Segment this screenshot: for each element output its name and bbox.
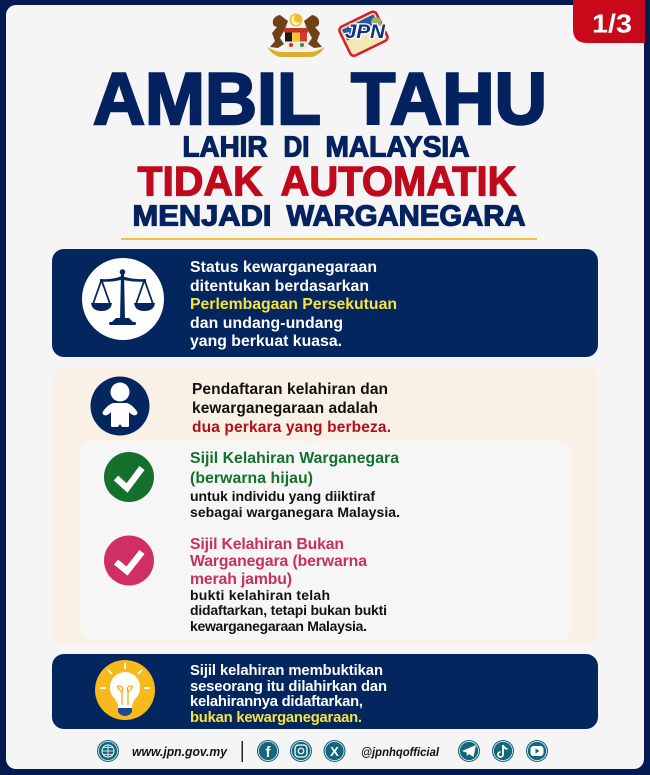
text: registration intro (192, 381, 391, 436)
social handle: @jpnhqofficial (361, 745, 440, 759)
dotted background patch (530, 5, 644, 75)
text: registration intro: Pendaftaran kelahiran dan (192, 381, 388, 398)
text: pink certificate (190, 536, 387, 634)
icon: tiktok (492, 740, 514, 762)
text: green certificate: Sijil Kelahiran Warganegara (190, 450, 399, 467)
page number tab: 1/3 (592, 8, 632, 38)
text: pink certificate: Sijil Kelahiran Bukan (190, 536, 344, 553)
text: green certificate (190, 450, 400, 520)
panel: certificate types (81, 441, 571, 640)
text: registration intro: dua perkara yang berbeza. (192, 419, 391, 436)
icon: green check (104, 452, 154, 502)
title (93, 59, 547, 232)
icon: baby (90, 376, 150, 436)
text: green certificate: (berwarna hijau) (190, 470, 313, 487)
title: DI (284, 132, 310, 164)
panel: constitution statement (52, 249, 598, 357)
icon: instagram (290, 740, 312, 762)
text: key takeaway (190, 663, 387, 726)
text: key takeaway: seseorang itu dilahirkan dan (190, 679, 387, 695)
icon: X: X (330, 744, 339, 759)
icon: youtube (526, 740, 548, 762)
text: green certificate: sebagai warganegara Malaysia. (190, 504, 400, 520)
text: constitution statement: Status kewarganegaraan (190, 259, 377, 276)
icon: facebook (257, 740, 279, 762)
title: TAHU (351, 59, 547, 140)
text: constitution statement (190, 259, 397, 350)
panel: key takeaway (52, 654, 598, 729)
icon: scales of justice (82, 258, 164, 340)
icon: telegram (458, 740, 480, 762)
logo: JPN (338, 10, 389, 57)
text: pink certificate: merah jambu) (190, 571, 292, 588)
text: pink certificate: bukti kelahiran telah (190, 587, 330, 603)
text: constitution statement: dan undang-undang (190, 315, 343, 332)
text: registration intro: kewarganegaraan adalah (192, 400, 378, 417)
text: constitution statement: ditentukan berdasarkan (190, 278, 369, 295)
icon: light bulb (95, 660, 155, 720)
text: key takeaway: kelahirannya didaftarkan, (190, 694, 363, 710)
title: LAHIR (182, 132, 268, 164)
text: key takeaway: bukan kewarganegaraan. (190, 710, 362, 726)
panel: registration vs citizenship (52, 368, 598, 645)
logo: JPN: JPN (345, 22, 386, 43)
website: www.jpn.gov.my (132, 744, 228, 759)
text: key takeaway: Sijil kelahiran membuktikan (190, 663, 383, 679)
logo: national crest (267, 14, 325, 57)
page number tab (573, 0, 645, 43)
icon: pink check (104, 536, 154, 586)
text: pink certificate: Warganegara (berwarna (190, 553, 367, 570)
title: AUTOMATIK (280, 158, 516, 204)
title: MALAYSIA (326, 132, 470, 164)
text: pink certificate: kewarganegaraan Malaysia. (190, 618, 367, 634)
text: green certificate: untuk individu yang diiktiraf (190, 488, 375, 504)
title: WARGANEGARA (286, 200, 526, 232)
title: MENJADI (132, 200, 272, 232)
text: constitution statement: yang berkuat kuasa. (190, 333, 342, 350)
text: constitution statement: Perlembagaan Persekutuan (190, 296, 397, 313)
text: pink certificate: didaftarkan, tetapi bukan bukti (190, 602, 387, 618)
icon: globe (97, 740, 119, 762)
icon: X (324, 740, 346, 762)
footer: contact bar (97, 740, 548, 762)
title: TIDAK (138, 158, 262, 204)
icon: facebook: f (266, 744, 272, 761)
title: AMBIL (93, 59, 321, 140)
